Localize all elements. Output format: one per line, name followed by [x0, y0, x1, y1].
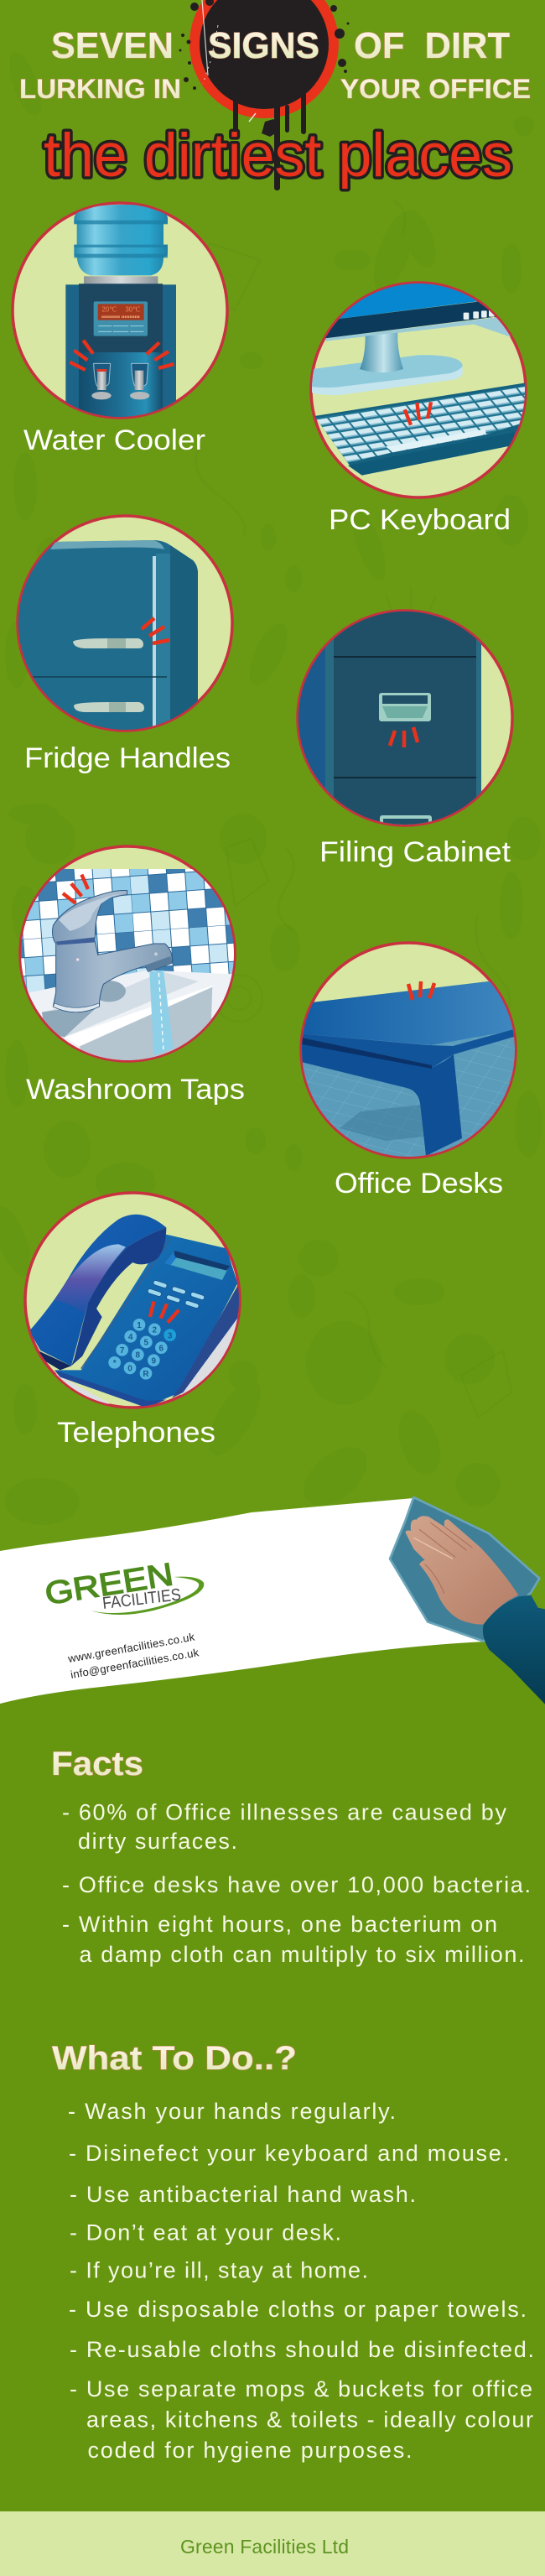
icon: cooler body: 30℃ — [125, 305, 140, 313]
icon: phone base — [54, 1235, 245, 1408]
icon: floor — [298, 1028, 520, 1162]
icon: wall tiles — [17, 869, 241, 1001]
title: lurking in your office: YOUR OFFICE — [340, 74, 531, 104]
what to do list: - Re-usable cloths should be disinfected. — [70, 2337, 534, 2362]
logo: green facilities: FACILITIES — [101, 1585, 182, 1613]
paint drips — [179, 0, 349, 190]
icon: keypad: 6 — [159, 1344, 164, 1353]
upper background with germ pattern — [0, 0, 545, 1644]
title: lurking in your office: LURKING IN — [19, 74, 181, 104]
icon: red alert marks — [70, 341, 174, 370]
icon: water bottle — [74, 205, 168, 284]
what to do list: coded for hygiene purposes. — [87, 2438, 413, 2463]
label: fridge handles: Fridge Handles — [24, 742, 231, 774]
contact details — [66, 1631, 200, 1681]
panel: pc keyboard — [306, 281, 530, 497]
sleeve — [483, 1595, 545, 1704]
label: filing cabinet: Filing Cabinet — [319, 836, 511, 868]
logo: green facilities — [43, 1557, 204, 1615]
what to do list: - Use separate mops & buckets for office — [70, 2376, 532, 2402]
title: seven signs of dirt: OF DIRT — [354, 25, 510, 66]
icon: red alert marks — [150, 1302, 179, 1323]
panel: washroom taps — [17, 846, 241, 1063]
icon: phone function buttons — [148, 1280, 205, 1309]
title: seven signs of dirt: SEVEN — [51, 25, 174, 66]
logo: green facilities: GREEN — [43, 1557, 176, 1612]
what to do list: - Use disposable cloths or paper towels. — [69, 2297, 527, 2322]
what to do list: - Wash your hands regularly. — [68, 2099, 396, 2124]
what to do list: areas, kitchens & toilets - ideally colour — [86, 2407, 533, 2433]
icon: running water — [149, 971, 174, 1055]
icon: filing cabinet — [293, 608, 481, 832]
footer — [0, 2511, 545, 2576]
icon: keypad: 8 — [136, 1351, 141, 1361]
icon: keypad: 7 — [120, 1346, 125, 1356]
title: seven signs of dirt — [51, 25, 510, 66]
icon: keypad: 1 — [137, 1321, 142, 1330]
heading: what to do: What To Do..? — [52, 2040, 297, 2077]
icon: cooler body — [65, 284, 176, 419]
icon: handset — [29, 1215, 166, 1370]
icon: fridge — [17, 540, 198, 738]
wiped white band — [0, 1498, 485, 1704]
what to do list: - Disinefect your keyboard and mouse. — [69, 2141, 509, 2166]
label: telephones: Telephones — [57, 1417, 215, 1449]
panel: water cooler — [13, 203, 227, 419]
hand — [405, 1516, 518, 1625]
icon: phone shadow — [55, 1312, 238, 1404]
icon: keyboard — [314, 382, 530, 476]
icon: keypad: 9 — [152, 1356, 157, 1366]
lower solid green — [0, 1619, 545, 2576]
facts list: - Office desks have over 10,000 bacteria. — [62, 1872, 531, 1897]
icon: keypad: R — [143, 1370, 149, 1379]
panel: fridge handles — [17, 516, 232, 738]
panel: office desks — [298, 943, 520, 1162]
label: pc keyboard: PC Keyboard — [329, 504, 511, 536]
title: the dirtiest places: the dirtiest places — [44, 122, 512, 190]
facts list: dirty surfaces. — [78, 1829, 237, 1854]
contact details: info@greenfacilities.co.uk — [70, 1646, 200, 1681]
cloth — [390, 1497, 539, 1642]
panel: telephones — [25, 1193, 245, 1409]
title: seven signs of dirt: SIGNS — [208, 25, 319, 66]
icon: keypad: * — [113, 1359, 117, 1368]
what to do list: - If you’re ill, stay at home. — [70, 2258, 368, 2283]
icon: keypad — [108, 1319, 176, 1380]
facts list: a damp cloth can multiply to six million. — [79, 1942, 525, 1967]
footer: Green Facilities Ltd — [180, 2536, 349, 2558]
title: lurking in your office — [19, 74, 531, 104]
what to do list: - Don’t eat at your desk. — [70, 2220, 341, 2245]
icon: monitor — [312, 284, 511, 395]
icon: red alert marks — [408, 981, 434, 1000]
icon: keypad: 5 — [144, 1339, 149, 1348]
icon: red alert marks — [390, 727, 418, 747]
heading: facts: Facts — [51, 1746, 143, 1782]
icon: keypad: 3 — [168, 1331, 173, 1340]
label: water cooler: Water Cooler — [23, 424, 205, 456]
icon: red alert marks — [142, 618, 169, 643]
icon: keypad: 0 — [127, 1365, 132, 1374]
facts list — [62, 1800, 531, 1967]
icon: red alert marks — [405, 402, 431, 425]
panel: filing cabinet — [293, 608, 512, 832]
icon: cooler body: 20℃ — [101, 305, 117, 313]
icon: desk — [298, 981, 520, 1156]
contact details: www.greenfacilities.co.uk — [66, 1631, 196, 1665]
facts list: - 60% of Office illnesses are caused by — [62, 1800, 506, 1825]
title: dirt splat badge — [179, 0, 349, 190]
icon: tap — [53, 890, 172, 1012]
label: washroom taps: Washroom Taps — [26, 1074, 245, 1106]
icon: hand wiping with cloth — [390, 1497, 545, 1704]
icon: keypad: 2 — [153, 1326, 158, 1335]
what to do list — [68, 2099, 534, 2463]
icon: keypad: 4 — [128, 1333, 133, 1342]
icon: sink — [29, 971, 232, 1060]
icon: red alert marks — [63, 875, 88, 903]
label: office desks: Office Desks — [335, 1168, 503, 1200]
what to do list: - Use antibacterial hand wash. — [70, 2182, 416, 2207]
facts list: - Within eight hours, one bacterium on — [62, 1912, 497, 1937]
